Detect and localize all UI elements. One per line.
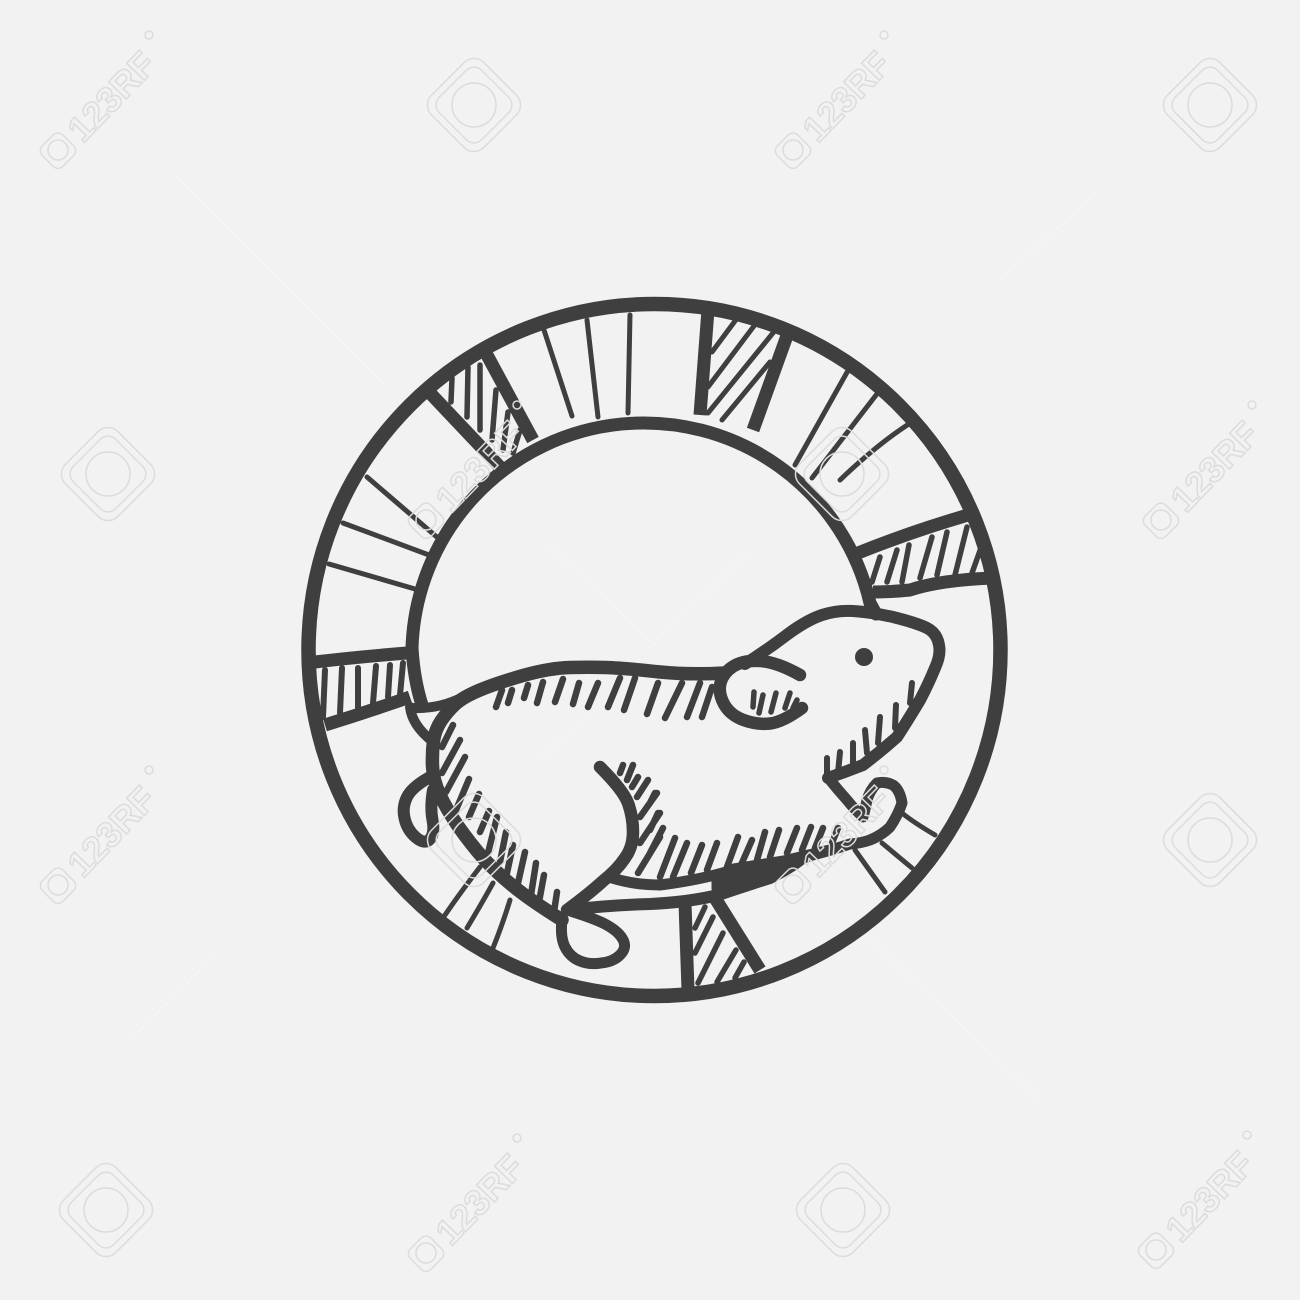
stamp lower centre-right: [772, 766, 899, 906]
fur hatching: flank: [620, 765, 838, 877]
fur hatching: back: [496, 678, 712, 718]
stamp bottom centre: [405, 1134, 532, 1274]
stamp lower centre-right: 123RF: [794, 778, 899, 885]
logo stamp 1: [422, 53, 526, 157]
stamp middle left: 123RF: [427, 413, 532, 520]
logo stamp 6: [1158, 788, 1262, 892]
logo stamp 2: [1158, 53, 1262, 157]
icon: hamster: [404, 611, 940, 964]
hamster tail loop: [404, 777, 433, 842]
hamster rear foot link: [410, 697, 463, 741]
logo stamp 5: [422, 788, 526, 892]
stamp top centre-right: 123RF: [794, 43, 899, 150]
thick wheel spokes: [315, 310, 993, 990]
stamp lower left: [37, 766, 164, 906]
hatching: bottom section: [695, 907, 744, 983]
chest wedge: [712, 840, 850, 897]
thin wheel rungs: [329, 315, 935, 948]
hamster back and rump: [432, 667, 725, 920]
stamp top left: 123RF: [59, 43, 164, 150]
hatching: top section: [708, 317, 777, 420]
stamp middle right: [1140, 401, 1267, 541]
stamp top centre-right: [772, 31, 899, 171]
logo stamp 8: [791, 1158, 895, 1262]
hatching: left section: [323, 663, 403, 717]
fur hatching: rump: [442, 725, 557, 912]
wheel inner rim: [412, 423, 876, 705]
stamp bottom right: [1135, 1131, 1262, 1271]
stamp top left: [37, 31, 164, 171]
stamp lower left: 123RF: [59, 778, 164, 885]
hatching: upper left section: [451, 365, 520, 453]
stamp middle left: [405, 401, 532, 541]
hamster head: [745, 611, 940, 778]
hamster belly and front paw: [612, 780, 902, 885]
fur hatching: ear: [753, 692, 797, 713]
stamp bottom centre: 123RF: [427, 1146, 532, 1253]
stamp bottom right: 123RF: [1157, 1143, 1262, 1250]
hamster lower belly: [567, 860, 800, 910]
hamster hind foot: [561, 910, 625, 964]
wheel outer rim: [308, 304, 1000, 996]
logo stamp 7: [54, 1158, 158, 1262]
hatching: right section: [872, 527, 982, 582]
hamster hind leg: [567, 767, 633, 910]
logo stamp 3: [56, 422, 160, 526]
hamster eye: [855, 648, 873, 666]
hamster ear: [720, 661, 802, 724]
logo stamp 4: [790, 422, 894, 526]
icon: hamster wheel: [308, 304, 1000, 996]
stamp middle right: 123RF: [1162, 413, 1267, 520]
fur hatching: muzzle: [827, 683, 912, 780]
